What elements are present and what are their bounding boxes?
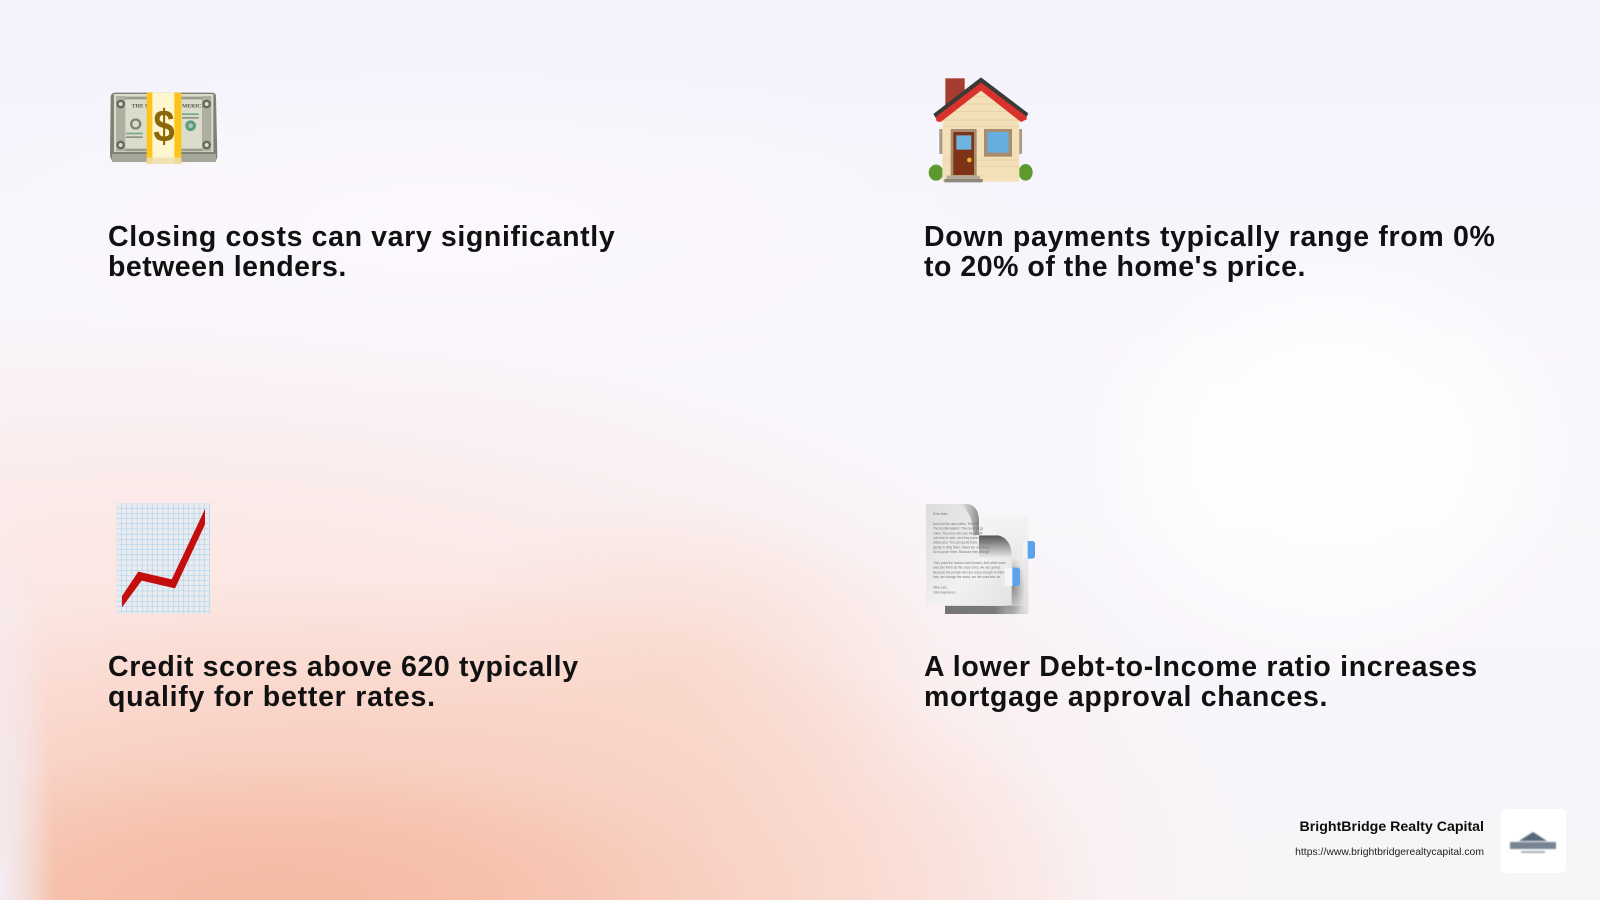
icon: stack of money: MERICA <box>182 103 206 109</box>
logo card <box>1501 809 1566 873</box>
icon: bookmarked documents <box>926 504 1035 614</box>
heading: closing costs: Closing costs can vary significantly <box>108 221 615 253</box>
heading: debt-to-income <box>924 651 1478 713</box>
icon: bookmarked documents: John Appleseed <box>933 590 956 594</box>
brand footer <box>1295 809 1566 873</box>
heading: credit scores: qualify for better rates. <box>108 681 436 713</box>
website url: https://www.brightbridgerealtycapital.com <box>1295 847 1484 858</box>
heading: credit scores <box>108 651 579 713</box>
icon: bookmarked documents: Take care, <box>933 586 948 590</box>
icon: bookmarked documents: glorify or vilify them. About the only thing <box>933 545 990 549</box>
heading: down payments: to 20% of the home's price. <box>924 251 1306 283</box>
icon: bookmarked documents: holes. The ones who see things diff <box>933 531 982 535</box>
icon: bookmarked documents: not fond of rules. And they have no <box>933 536 982 540</box>
icon: bookmarked documents: status quo. You can quote them, disagree <box>933 541 991 545</box>
icon: bookmarked documents: Because the people who are crazy enough to think <box>933 570 1004 574</box>
heading: debt-to-income: mortgage approval chances. <box>924 681 1328 713</box>
heading: closing costs: between lenders. <box>108 251 347 283</box>
icon: bookmarked documents: The troublemakers. The round pegs <box>933 527 984 531</box>
heading: closing costs <box>108 221 615 283</box>
icon: bookmarked documents: They push the human race forward. And while some <box>933 561 1006 565</box>
icon: bookmarked documents: may see them as the crazy ones, we see genius. <box>933 566 1001 570</box>
icon: logo roof <box>1509 831 1557 854</box>
icon: bookmarked documents: they can change the world, are the ones who do. <box>933 575 1001 579</box>
icon: stack of money: $ <box>153 101 175 151</box>
heading: debt-to-income: A lower Debt-to-Income ratio increases <box>924 651 1478 683</box>
icon: bookmarked documents: do is ignore them. Because they change <box>933 550 990 554</box>
icon: stack of money: THE UN <box>132 103 154 109</box>
heading: credit scores: Credit scores above 620 typically <box>108 651 579 683</box>
brand name: BrightBridge Realty Capital <box>1300 819 1484 835</box>
icon: bookmarked documents: And into the rainy skies, The little <box>933 522 980 526</box>
heading: down payments: Down payments typically range from 0% <box>924 221 1496 253</box>
icon: stack of money <box>110 92 218 164</box>
heading: down payments <box>924 221 1496 283</box>
icon: bookmarked documents: Dear Kate, <box>933 512 948 516</box>
icon: house <box>928 78 1033 182</box>
icon: chart increasing <box>116 503 210 614</box>
